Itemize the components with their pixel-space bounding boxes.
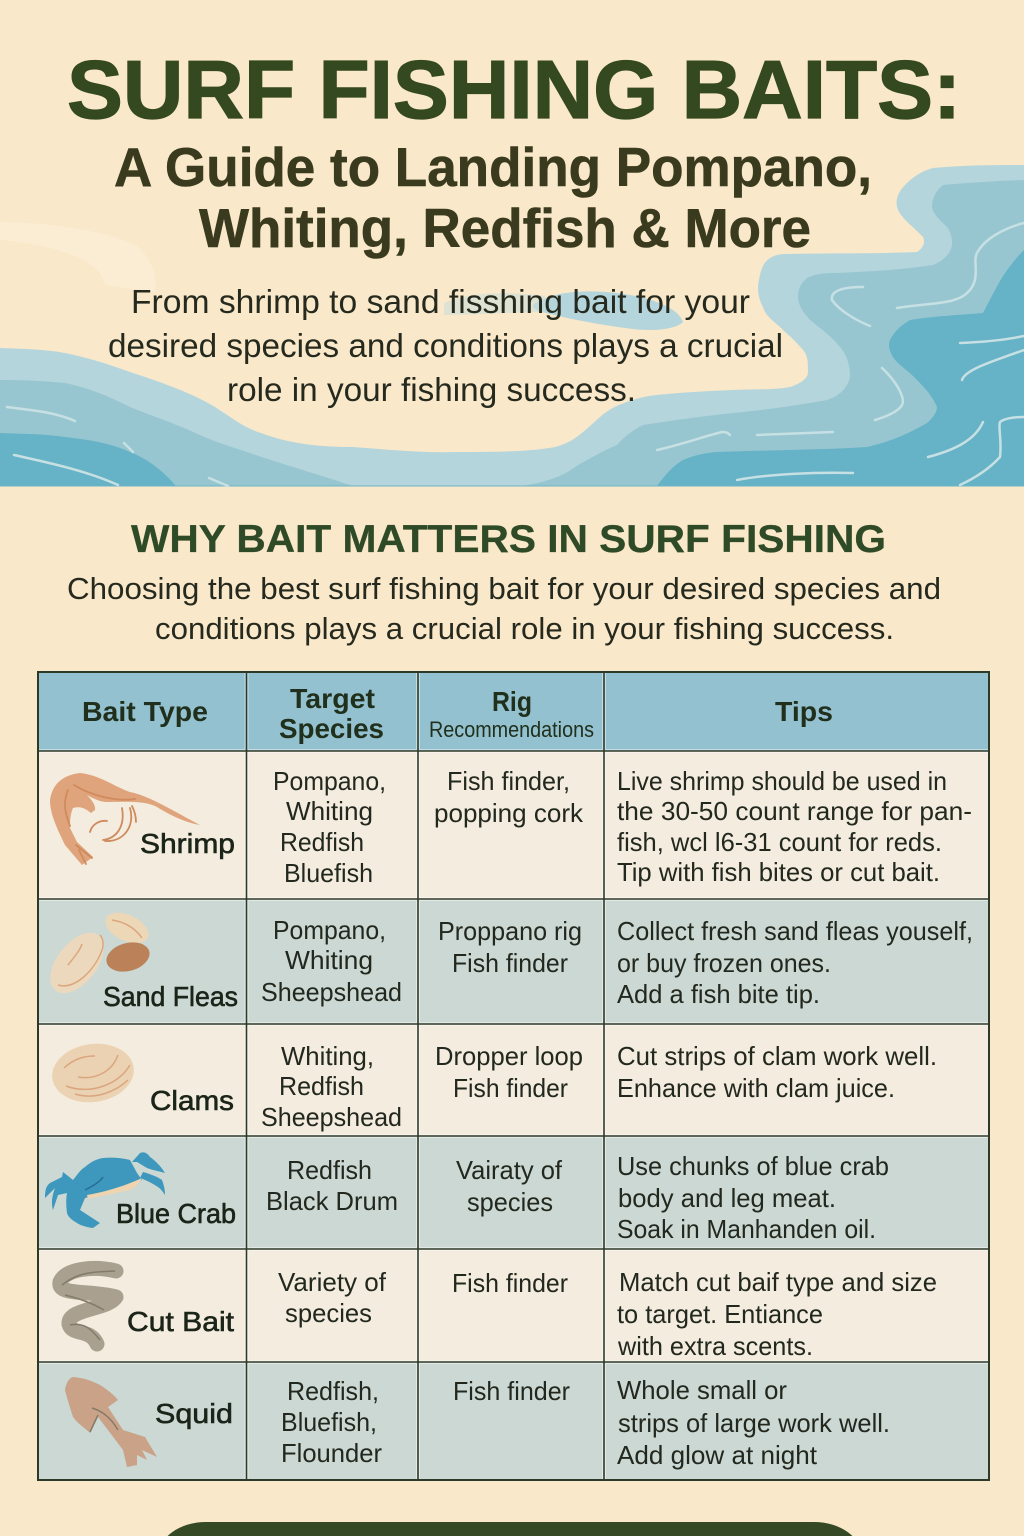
- bottom banner: [158, 1522, 862, 1536]
- icon: squid: [65, 1377, 157, 1467]
- row: sand fleas: Add a fish bite tip.: [617, 979, 820, 1009]
- row: clams: Redfish: [279, 1071, 364, 1101]
- row: shrimp: Shrimp: [140, 828, 235, 859]
- row: cut bait: Match cut baif type and size: [619, 1267, 937, 1297]
- row: shrimp: Fish finder,: [447, 766, 570, 796]
- table header row: [38, 672, 989, 751]
- row: shrimp: Live shrimp should be used in: [617, 766, 947, 796]
- row: cut bait: with extra scents.: [617, 1331, 813, 1361]
- row: squid: Bluefish,: [281, 1407, 377, 1437]
- row: sand fleas: Whiting: [285, 945, 373, 975]
- row: sand fleas: Proppano rig: [438, 916, 582, 946]
- intro text: From shrimp to sand fisshing bait for your: [131, 283, 750, 320]
- row: shrimp: Whiting: [286, 796, 373, 826]
- row: blue crab: [45, 1151, 889, 1244]
- row backgrounds: [38, 751, 989, 1480]
- row: clams: [48, 1039, 937, 1132]
- row: blue crab: Blue Crab: [116, 1198, 236, 1229]
- row: clams: Whiting,: [281, 1041, 374, 1071]
- row: shrimp: the 30-50 count range for pan-: [617, 796, 972, 826]
- row: sand fleas: Collect fresh sand fleas youself,: [617, 916, 973, 946]
- icon: clam: [48, 1039, 138, 1107]
- row: sand fleas: Sheepshead: [261, 977, 402, 1007]
- subtitle: [114, 136, 872, 259]
- subtitle: Whiting, Redfish & More: [199, 197, 811, 259]
- row: sand fleas: [40, 906, 973, 1012]
- subtitle: A Guide to Landing Pompano,: [114, 136, 872, 198]
- row: shrimp: popping cork: [434, 798, 584, 828]
- row: shrimp: Bluefish: [284, 858, 373, 888]
- row: cut bait: species: [285, 1298, 372, 1328]
- intro text: role in your fishing success.: [227, 371, 636, 408]
- row: cut bait: Fish finder: [452, 1268, 568, 1298]
- section heading: WHY BAIT MATTERS IN SURF FISHING: [131, 518, 886, 561]
- row: squid: Fish finder: [453, 1376, 570, 1406]
- title: SURF FISHING BAITS:: [67, 43, 961, 136]
- table grid lines: [38, 672, 989, 1480]
- row: blue crab: Soak in Manhanden oil.: [617, 1214, 876, 1244]
- row: squid: strips of large work well.: [618, 1408, 890, 1438]
- bait table: [38, 672, 989, 1480]
- section paragraph: [67, 571, 941, 646]
- row: cut bait: [60, 1267, 937, 1361]
- icon: sand fleas: [40, 906, 153, 1003]
- row: cut bait: to target. Entiance: [617, 1299, 823, 1329]
- row: shrimp: [50, 766, 972, 888]
- row: cut bait: Variety of: [278, 1267, 387, 1297]
- row: shrimp: fish, wcl l6-31 count for reds.: [617, 827, 942, 857]
- intro text: desired species and conditions plays a crucial: [108, 327, 783, 364]
- section paragraph: conditions plays a crucial role in your fishing success.: [155, 611, 894, 646]
- icon: shrimp: [50, 773, 200, 865]
- row: blue crab: Redfish: [287, 1155, 372, 1185]
- table header row: Recommendations: [429, 717, 594, 742]
- table header row: Tips: [775, 696, 833, 727]
- row: squid: Redfish,: [287, 1376, 379, 1406]
- table header row: Rig: [492, 686, 532, 717]
- table header row: Bait Type: [82, 696, 208, 727]
- icon: blue crab: [45, 1152, 165, 1228]
- row: sand fleas: or buy frozen ones.: [617, 948, 831, 978]
- row: squid: Whole small or: [617, 1375, 787, 1405]
- intro text: [108, 283, 783, 408]
- icon: cut bait: [60, 1269, 116, 1344]
- row: blue crab: Use chunks of blue crab: [617, 1151, 889, 1181]
- row: blue crab: Black Drum: [266, 1186, 398, 1216]
- row: cut bait: Cut Bait: [127, 1306, 234, 1337]
- row: squid: Add glow at night: [617, 1440, 818, 1470]
- row: blue crab: body and leg meat.: [618, 1183, 836, 1213]
- row: shrimp: Pompano,: [273, 766, 386, 796]
- row: sand fleas: Sand Fleas: [103, 981, 238, 1012]
- row: squid: Flounder: [281, 1438, 382, 1468]
- row: clams: Clams: [150, 1085, 234, 1116]
- row: shrimp: Redfish: [280, 827, 364, 857]
- row: blue crab: Vairaty of: [456, 1155, 563, 1185]
- row: squid: Squid: [155, 1398, 233, 1429]
- row: clams: Dropper loop: [435, 1041, 583, 1071]
- row: shrimp: Tip with fish bites or cut bait.: [617, 857, 940, 887]
- row: clams: Cut strips of clam work well.: [617, 1041, 937, 1071]
- hero water illustration: [0, 165, 1024, 486]
- table header row: Target: [290, 683, 375, 714]
- row: sand fleas: Fish finder: [452, 948, 568, 978]
- row: clams: Fish finder: [453, 1073, 568, 1103]
- row: clams: Enhance with clam juice.: [617, 1073, 895, 1103]
- row: clams: Sheepshead: [261, 1102, 402, 1132]
- section paragraph: Choosing the best surf fishing bait for your desired species and: [67, 571, 941, 606]
- row: blue crab: species: [467, 1187, 553, 1217]
- row: sand fleas: Pompano,: [273, 915, 386, 945]
- row: squid: [65, 1375, 890, 1470]
- table header row: Species: [279, 713, 384, 744]
